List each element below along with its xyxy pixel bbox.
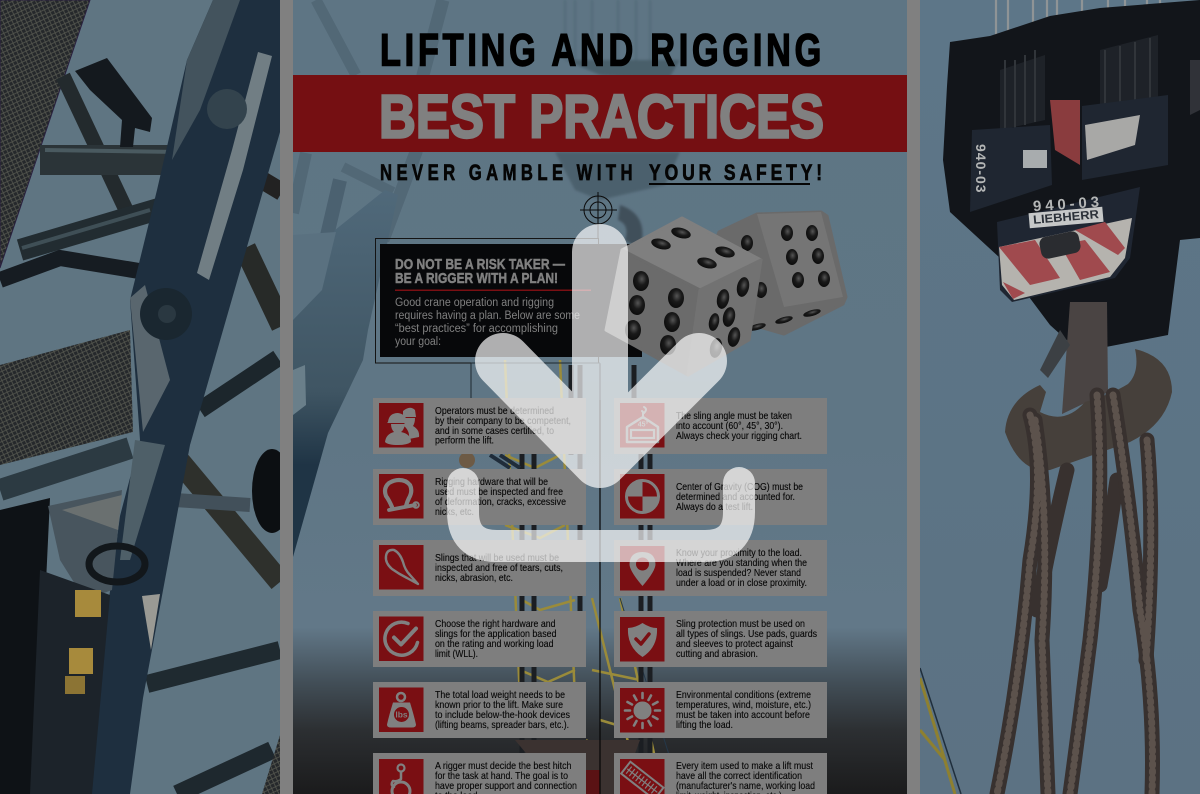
dice illustration (606, 212, 846, 375)
icon: hook and ring (379, 759, 424, 794)
intro body: “best practices” for accomplishing (395, 323, 558, 335)
card: proximity: Know your proximity to the load. (676, 548, 802, 559)
icon: centre of gravity (620, 474, 664, 518)
card: identification: (manufacturer's name, working load (676, 781, 815, 792)
faded boom lower left (293, 190, 398, 557)
intro body: Good crane operation and rigging (395, 297, 554, 309)
intro heading: DO NOT BE A RISK TAKER — (395, 256, 565, 273)
card: centre of gravity: Always do a test lift. (676, 502, 753, 513)
mesh walkway upper (0, 0, 90, 268)
left photo: crane boom (0, 0, 292, 794)
faded hook block (556, 58, 680, 244)
icon: check circle (379, 616, 424, 661)
card: proximity: under a load or in close proximity. (676, 578, 807, 589)
card: operators: perform the lift. (435, 436, 494, 446)
warning sticker (142, 594, 160, 650)
card: proximity (614, 540, 827, 596)
card: proximity: Where are you standing when the (676, 558, 807, 569)
card: sling angle: Always check your rigging chart. (676, 431, 802, 442)
card: right hardware: slings for the application based (435, 629, 557, 640)
front plate (997, 187, 1140, 302)
hoist lines (994, 0, 1162, 34)
icon: map pin (620, 546, 664, 590)
cab (0, 498, 50, 794)
icon: sun (620, 688, 664, 732)
back die (700, 212, 846, 334)
card: identification: have all the correct identification (676, 771, 802, 782)
card: operators: and in some cases certified, to (435, 426, 554, 437)
yellow lights (75, 590, 101, 617)
icon: sling angle (620, 403, 664, 448)
card: rigging hardware: Rigging hardware that will be (435, 477, 548, 488)
icon: shackle (379, 474, 424, 518)
card: sling angle (614, 398, 827, 454)
card: sling protection: all types of slings. Use pads, guards (676, 629, 817, 640)
card: load weight: The total load weight needs to be (435, 690, 565, 701)
panel: best practice cards, right column (614, 398, 827, 794)
card: environmental conditions: lifting the load. (676, 720, 733, 731)
centre guide line (599, 364, 601, 794)
icon: identification tag (620, 759, 664, 794)
card: operators (373, 398, 586, 454)
clamp (89, 546, 145, 582)
hook block dark silhouette (943, 0, 1200, 352)
card: rigging hardware: used must be inspected and free (435, 487, 563, 498)
intro heading: BE A RIGGER WITH A PLAN! (395, 270, 558, 287)
card: identification (614, 753, 827, 794)
card: environmental conditions: temperatures, wind, moisture, etc.) (676, 700, 811, 711)
card: sling protection: and sleeves to protect against (676, 639, 793, 650)
card: load weight (373, 682, 586, 738)
card: rigging hardware (373, 469, 586, 525)
boom tube (83, 0, 280, 794)
tagline: NEVER GAMBLE WITH (380, 160, 637, 185)
intro body: requires having a plan. Below are some (395, 310, 580, 322)
card: rigging hardware: of deformation, cracks, excessive (435, 497, 566, 508)
card: sling protection: cutting and abrasion. (676, 649, 758, 660)
card: environmental conditions (614, 682, 827, 738)
front die (606, 218, 761, 375)
card: sling angle: into account (60°, 45°, 30°). (676, 421, 783, 432)
right photo: crane hook and slings: LIEBHERR (1033, 207, 1100, 227)
wheel (252, 449, 280, 533)
banner heading: BEST PRACTICES (379, 82, 824, 150)
card: slings: nicks, abrasion, etc. (435, 573, 513, 584)
icon: weight: lbs (395, 710, 408, 720)
side number: 940-03 (973, 144, 989, 194)
red banner (293, 75, 907, 152)
card: right hardware (373, 611, 586, 667)
card: hitch: A rigger must decide the best hitch (435, 761, 572, 772)
card: hitch: have proper support and connection (435, 781, 577, 792)
card: environmental conditions: must be taken into account before (676, 710, 810, 721)
card: right hardware: limit (WLL). (435, 649, 478, 660)
hook (1062, 302, 1108, 414)
side plates (970, 125, 1052, 212)
mesh walkway lower (0, 330, 133, 465)
card: load weight: known prior to the lift. Make sure (435, 700, 563, 711)
right photo: crane hook and slings (920, 0, 1200, 794)
faded boom struts (293, 0, 443, 240)
tagline: YOUR SAFETY! (649, 160, 826, 185)
card: hitch: for the task at hand. The goal is to (435, 771, 568, 782)
intro heading (395, 256, 565, 287)
card: centre of gravity (614, 469, 827, 525)
card: right hardware: on the rating and working load (435, 639, 554, 650)
card: sling protection: Sling protection must be used on (676, 619, 805, 630)
poster background photo (293, 0, 907, 794)
card: identification: Every item used to make a lift must (676, 761, 813, 772)
yellow boom corner (920, 668, 961, 794)
card: slings: inspected and free of tears, cuts, (435, 563, 563, 574)
card: rigging hardware: nicks, etc. (435, 507, 474, 518)
icon: weight (379, 688, 424, 732)
icon: download overlay (463, 252, 739, 546)
title: LIFTING AND RIGGING (380, 24, 825, 76)
icon: hard hat workers (379, 403, 424, 448)
card: sling protection (614, 611, 827, 667)
card: centre of gravity: Center of Gravity (COG) must be (676, 482, 803, 493)
panel: intro box (376, 238, 642, 400)
card: slings: Slings that will be used must be (435, 553, 559, 564)
right photo: crane hook and slings: 940-03 (1033, 194, 1100, 215)
card: environmental conditions: Environmental conditions (extreme (676, 690, 811, 701)
icon: sling angle: 45° (638, 420, 648, 428)
icon: target crosshair (580, 192, 617, 238)
card: operators: by their company to be competent, (435, 416, 571, 427)
black bracket (75, 58, 152, 147)
panel: best practice cards, left column (373, 398, 586, 794)
card: load weight: (lifting beams, spreader bars, etc.). (435, 720, 569, 731)
card: centre of gravity: determined and accounted for. (676, 492, 795, 503)
central poster (293, 0, 907, 794)
card: load weight: to include below-the-hook devices (435, 710, 570, 721)
intro body: your goal: (395, 336, 441, 348)
card: slings (373, 540, 586, 596)
intro body (395, 297, 580, 348)
text: Operators must be determined (435, 406, 554, 417)
card: right hardware: Choose the right hardware and (435, 619, 556, 630)
icon: sling loop (379, 545, 424, 590)
card: proximity: load is suspended? Never stand (676, 568, 801, 579)
card: sling angle: The sling angle must be taken (676, 411, 792, 422)
wire rope slings (997, 395, 1152, 794)
card: hitch (373, 753, 586, 794)
crane tower and ropes behind cards (504, 360, 669, 753)
icon: shield check (620, 617, 664, 662)
